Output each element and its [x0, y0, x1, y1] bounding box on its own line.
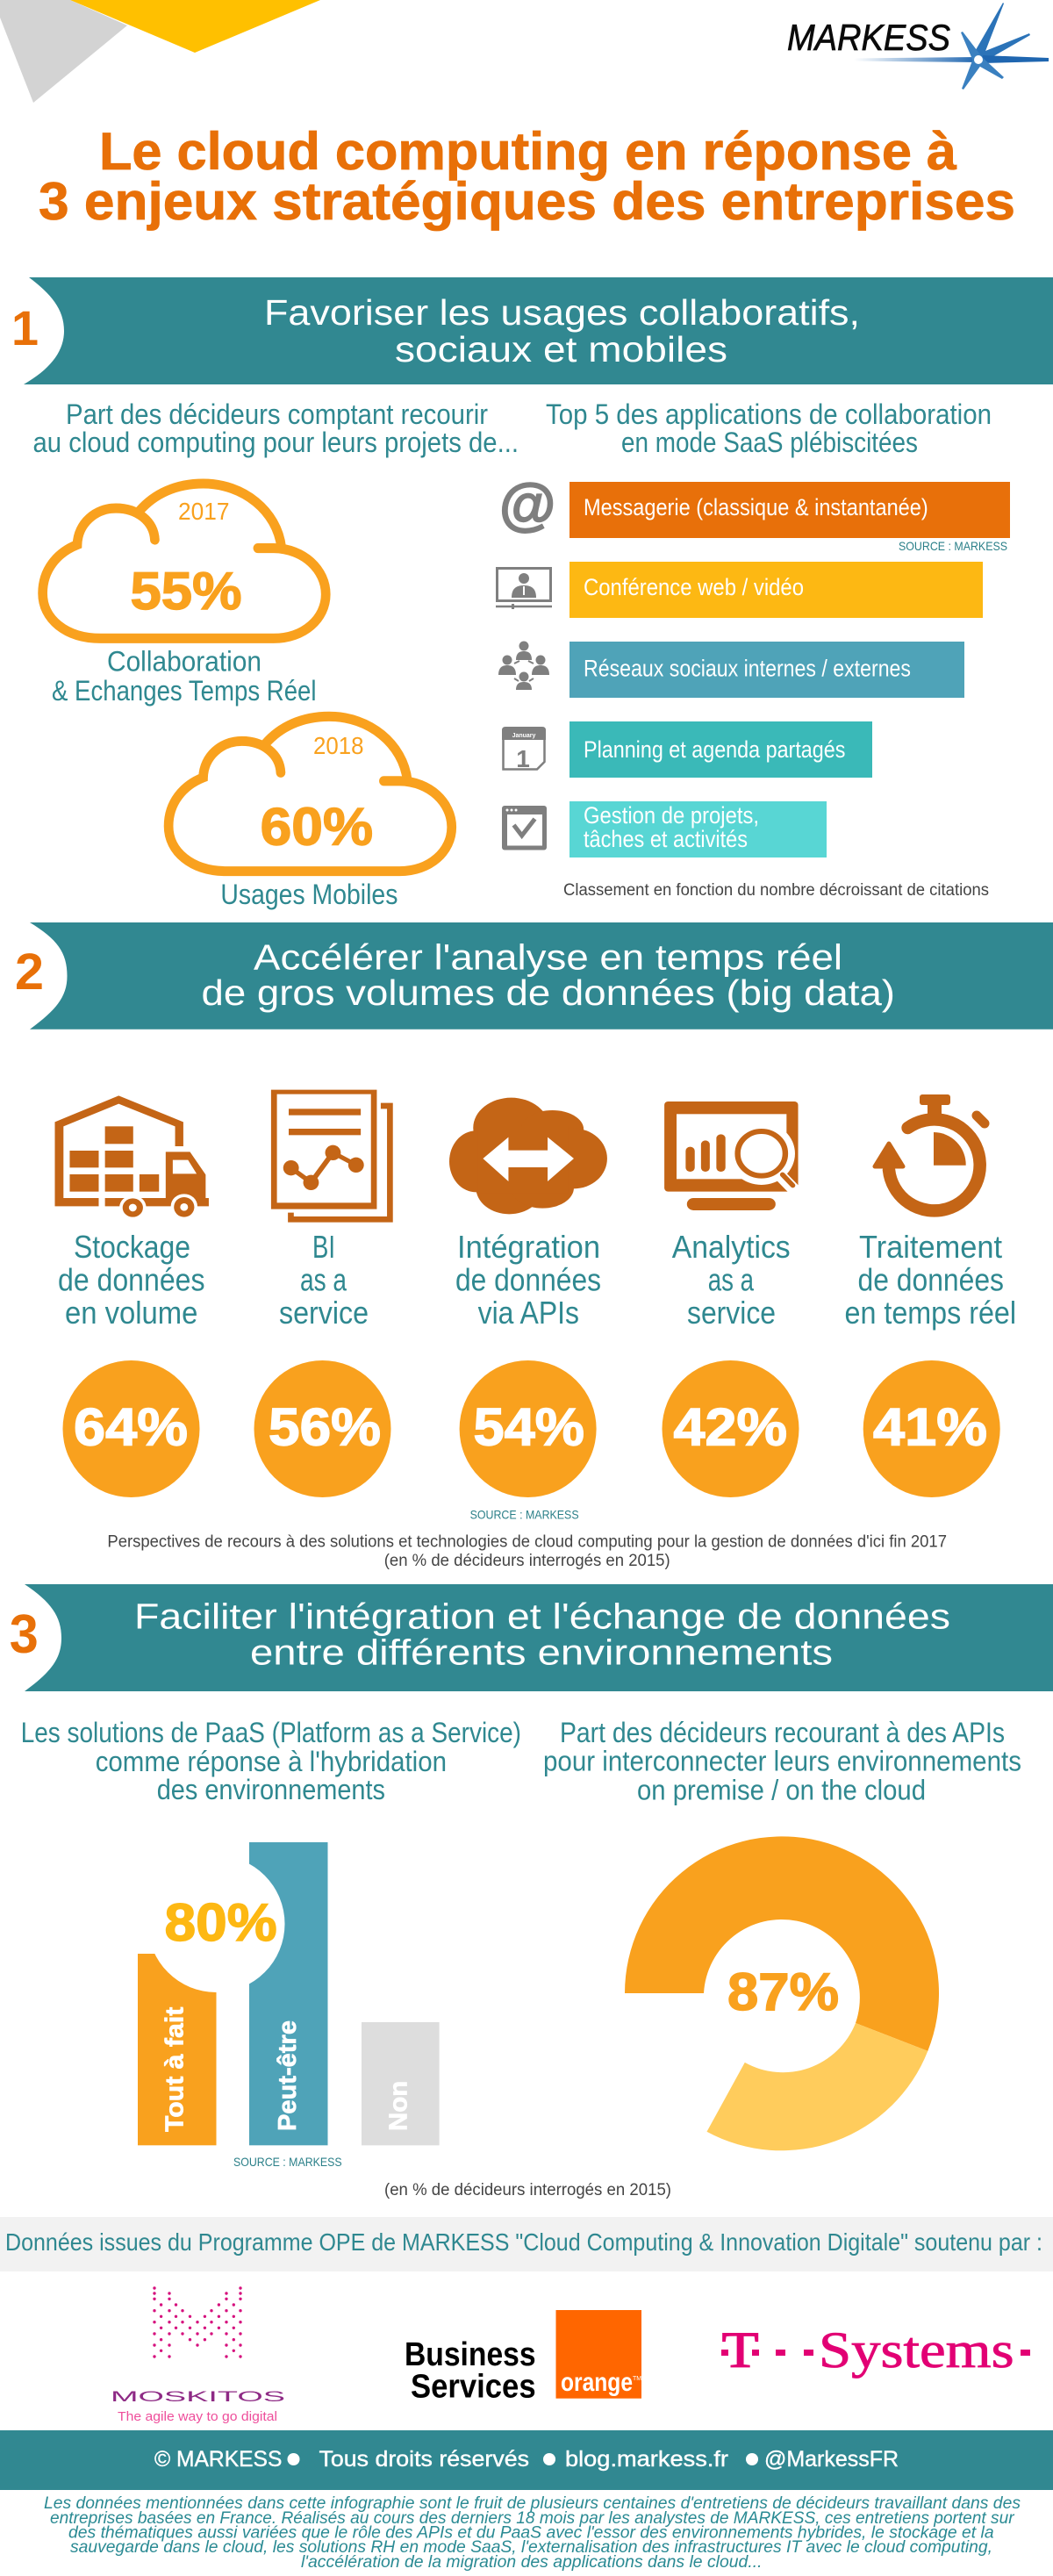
disclaimer text: sauvegarde dans le cloud, les solutions RH en mode SaaS, l'externalisation des infrastructures IT avec le cloud computing,	[70, 2538, 992, 2557]
label: BI as a service	[279, 1229, 369, 1331]
icon: API cloud arrow	[449, 1098, 607, 1214]
bar chart: PaaS: 80%	[165, 1893, 277, 1952]
title	[39, 122, 1015, 231]
icon: web conference	[496, 569, 552, 609]
heading: PaaS	[21, 1717, 521, 1805]
label: stockage: en volume	[65, 1295, 197, 1331]
stat circle: 56%: 56%	[269, 1398, 381, 1457]
icon: BI report	[271, 1090, 393, 1223]
bar: réseaux sociaux	[569, 642, 964, 698]
logo: Moskitos: MOSKITOS	[111, 2388, 285, 2405]
heading: top 5 applications: Top 5 des applications de collaboration	[546, 398, 992, 430]
label: BI as a service: BI	[312, 1229, 335, 1265]
section 3 banner	[10, 1584, 1053, 1691]
note: perspectives	[107, 1533, 947, 1570]
bar: gestion de projets: Gestion de projets,	[584, 802, 759, 829]
note: en % de décideurs: (en % de décideurs interrogés en 2015)	[384, 2181, 671, 2199]
stat circle: 54%: 54%	[474, 1398, 584, 1457]
label: intégration	[455, 1229, 601, 1331]
logo: MARKESS	[787, 3, 1049, 90]
cloud 2018: 60%	[168, 716, 452, 872]
icon: calendar: 1	[516, 745, 530, 772]
label: stockage	[58, 1229, 205, 1331]
bar: conférence web	[569, 562, 983, 618]
bar: messagerie: Messagerie (classique & instantanée)	[584, 494, 928, 520]
disclaimer text: entreprises basées en France. Réalisés au cours des derniers 18 mois par les analystes de MARKESS, ces entretiens portent sur	[50, 2509, 1014, 2528]
label: intégration: via APIs	[478, 1295, 579, 1331]
source note: SOURCE : MARKESS	[233, 2155, 342, 2169]
footer band: blog.markess.fr	[565, 2447, 728, 2472]
label: traitement: de données	[858, 1262, 1004, 1298]
section 3 banner: entre différents environnements	[250, 1632, 833, 1673]
label: collaboration	[52, 646, 316, 707]
footer band: @MarkessFR	[764, 2447, 899, 2472]
bar: gestion de projets: tâches et activités	[584, 826, 748, 852]
logo: Business Services orange: TM	[633, 2376, 641, 2382]
logo: Business Services orange: Services	[411, 2369, 536, 2406]
footer band: Tous droits réservés	[319, 2447, 529, 2472]
icon: task check	[502, 806, 547, 850]
label: traitement: en temps réel	[844, 1295, 1016, 1331]
disclaimer text: des thématiques aussi variées que le rôle des APIs et du PaaS avec l'essor des environnements hybrides, le stockage et la	[68, 2524, 994, 2543]
heading: PaaS: des environnements	[157, 1774, 385, 1805]
bar: réseaux sociaux: Réseaux sociaux internes / externes	[584, 655, 911, 681]
icon: at sign: @	[498, 472, 555, 537]
logo: Business Services orange: orange	[561, 2368, 633, 2397]
icon: warehouse truck	[54, 1095, 209, 1219]
label: intégration: Intégration	[457, 1229, 600, 1265]
section 1 banner: Favoriser les usages collaboratifs,	[264, 292, 860, 333]
donut chart: 87%: 87%	[727, 1962, 839, 2021]
heading: APIs: on premise / on the cloud	[637, 1775, 926, 1806]
section 1 banner: 1	[11, 300, 39, 355]
label: BI as a service: service	[279, 1295, 369, 1331]
title: 3 enjeux stratégiques des entreprises	[39, 172, 1015, 231]
bar chart: PaaS	[138, 1842, 440, 2145]
label: analytics	[672, 1229, 791, 1331]
bar chart: PaaS: Tout à fait	[161, 2006, 190, 2132]
stat circle: 42%: 42%	[674, 1398, 787, 1457]
heading: APIs: Part des décideurs recourant à des APIs	[560, 1717, 1005, 1748]
heading: top 5 applications: en mode SaaS plébiscitées	[621, 427, 918, 458]
stat circle: 64%: 64%	[74, 1398, 188, 1457]
logo: MARKESS: MARKESS	[787, 17, 950, 58]
sponsors banner	[0, 2217, 1053, 2271]
section 1 banner	[11, 277, 1053, 384]
source note: SOURCE : MARKESS	[899, 539, 1007, 553]
icon: analytics monitor	[664, 1101, 799, 1210]
section 3 banner: Faciliter l'intégration et l'échange de données	[134, 1597, 950, 1637]
cloud 2018: 60%: 60%	[261, 798, 373, 857]
disclaimer text	[44, 2494, 1021, 2572]
heading: PaaS: comme réponse à l'hybridation	[96, 1746, 447, 1777]
section 2 banner: 2	[15, 944, 44, 1001]
section 1 banner: sociaux et mobiles	[395, 329, 727, 370]
decorative corner triangles	[0, 0, 320, 103]
label: stockage: Stockage	[74, 1229, 190, 1265]
bar: conférence web: Conférence web / vidéo	[584, 574, 804, 600]
label: intégration: de données	[455, 1262, 601, 1298]
logo: Moskitos: The agile way to go digital	[118, 2409, 277, 2424]
label: collaboration: & Echanges Temps Réel	[52, 675, 316, 707]
label: analytics: as a	[708, 1262, 755, 1298]
stat circle: 56%	[254, 1360, 391, 1497]
disclaimer text: Les données mentionnées dans cette infographie sont le fruit de plusieurs centaines d'entretiens de décideurs travaillant dans des	[44, 2494, 1021, 2513]
donut chart: 87%	[625, 1836, 939, 2150]
footer band	[0, 2430, 1053, 2490]
logo: T-Systems	[721, 2321, 1030, 2379]
icon: stopwatch	[875, 1094, 985, 1210]
heading: APIs: pour interconnecter leurs environnements	[543, 1746, 1021, 1777]
label: traitement: Traitement	[859, 1229, 1002, 1265]
label: traitement	[844, 1229, 1016, 1331]
icon: calendar: January	[512, 733, 536, 739]
stat circle: 41%: 41%	[873, 1398, 987, 1457]
label: BI as a service: as a	[300, 1262, 347, 1298]
heading: PaaS: Les solutions de PaaS (Platform as a Service)	[21, 1717, 521, 1748]
logo: T-Systems: T	[722, 2321, 759, 2379]
section 3 banner: 3	[10, 1604, 39, 1665]
disclaimer text: l'accélération de la migration des applications dans le cloud...	[301, 2553, 763, 2572]
label: analytics: service	[687, 1295, 776, 1331]
cloud 2017: 55%: 2017	[178, 498, 230, 525]
heading: part des décideurs: au cloud computing pour leurs projets de...	[33, 427, 519, 458]
logo: T-Systems: Systems	[819, 2321, 1014, 2379]
icon: social network people	[498, 641, 549, 690]
stat circle: 41%	[863, 1360, 1000, 1497]
note: perspectives: Perspectives de recours à des solutions et technologies de cloud computing pour la gestion de données d'ici fin 2017	[107, 1533, 947, 1552]
logo: Business Services orange: Business	[405, 2336, 536, 2373]
cloud 2017: 55%	[43, 484, 326, 638]
bar chart: PaaS: Peut-être	[274, 2020, 302, 2131]
icon: calendar	[502, 727, 546, 772]
bar: planning: Planning et agenda partagés	[584, 736, 845, 763]
label: usages mobiles: Usages Mobiles	[220, 879, 398, 910]
note: classement: Classement en fonction du nombre décroissant de citations	[563, 881, 989, 900]
bar chart: PaaS: Non	[384, 2081, 412, 2131]
logo: Business Services orange	[405, 2310, 641, 2406]
heading: part des décideurs: Part des décideurs comptant recourir	[66, 398, 488, 430]
title: Le cloud computing en réponse à	[99, 122, 957, 181]
note: perspectives: (en % de décideurs interrogés en 2015)	[384, 1552, 670, 1570]
stat circle: 64%	[63, 1360, 200, 1497]
bar: messagerie	[569, 482, 1010, 538]
logo: Moskitos	[111, 2288, 285, 2424]
label: collaboration: Collaboration	[107, 646, 261, 678]
heading: APIs	[543, 1717, 1021, 1806]
stat circle: 42%	[662, 1360, 799, 1497]
bar: gestion de projets	[569, 801, 827, 857]
label: stockage: de données	[58, 1262, 205, 1298]
bar: planning	[569, 721, 872, 778]
section 2 banner: de gros volumes de données (big data)	[202, 972, 895, 1013]
section 2 banner: Accélérer l'analyse en temps réel	[254, 936, 842, 977]
heading: part des décideurs	[33, 398, 519, 458]
heading: top 5 applications	[546, 398, 992, 458]
footer band: © MARKESS	[154, 2447, 282, 2472]
section 2 banner	[15, 922, 1053, 1030]
cloud 2017: 55%: 55%	[130, 562, 242, 621]
label: analytics: Analytics	[672, 1229, 791, 1265]
cloud 2018: 60%: 2018	[313, 732, 363, 759]
source note: SOURCE : MARKESS	[470, 1508, 579, 1522]
stat circle: 54%	[460, 1360, 597, 1497]
